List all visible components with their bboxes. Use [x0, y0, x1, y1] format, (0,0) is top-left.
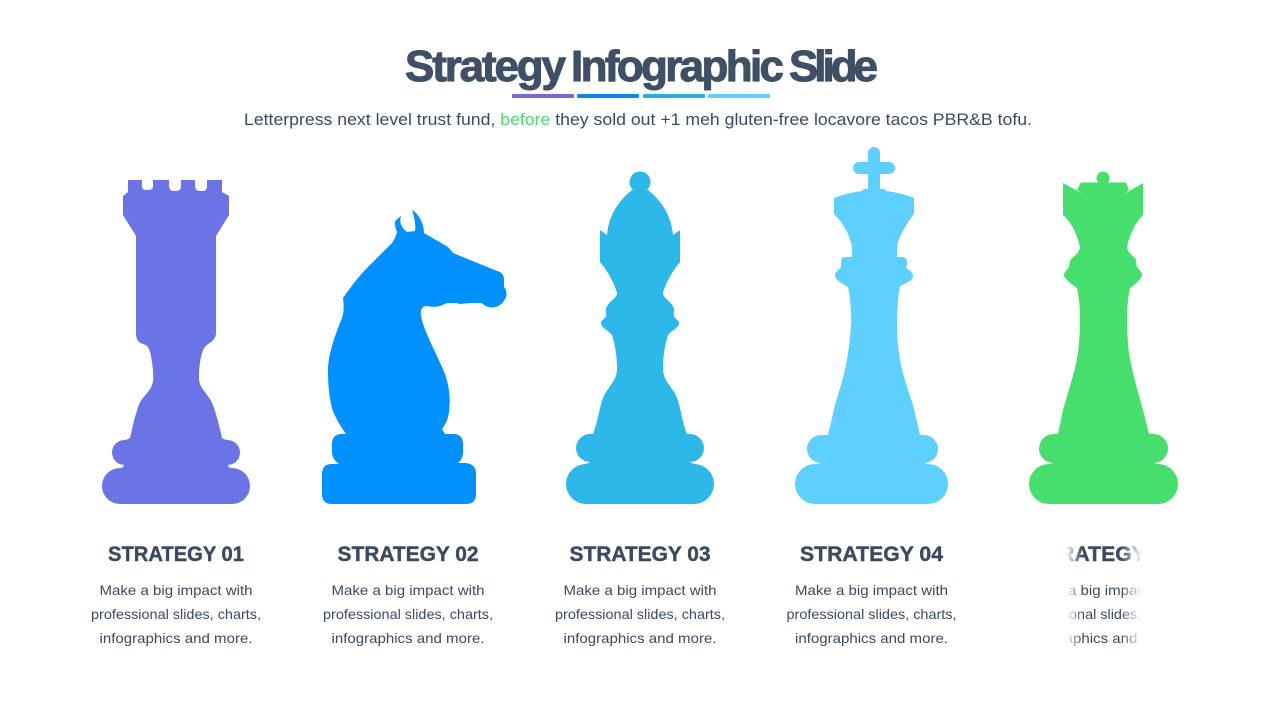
strategy 05 text, faded at both edges: infographics and more.: [1027, 630, 1180, 646]
strategy 02 text: STRATEGY 02: [338, 543, 478, 566]
strategy 02 text: professional slides, charts,: [323, 606, 493, 622]
icon: queen chess piece: [1029, 172, 1178, 504]
strategy 03 text: Make a big impact with: [564, 582, 716, 598]
strategy 01 text: professional slides, charts,: [91, 606, 261, 622]
strategy 04 text: STRATEGY 04: [800, 543, 943, 566]
icon: knight chess piece: [322, 210, 507, 504]
icon: king chess piece: [795, 147, 948, 504]
strategy 02 text: [323, 543, 493, 646]
strategy 01 text: infographics and more.: [100, 630, 252, 646]
title: Infographic: [571, 42, 784, 91]
strategy 03 text: infographics and more.: [564, 630, 716, 646]
strategy 03 text: [555, 543, 725, 646]
strategy 03 text: STRATEGY 03: [570, 543, 710, 566]
subtitle: Letterpress next level trust fund, before they sold out +1 meh gluten-free locavore tacos PBR&B tofu.: [244, 110, 1032, 129]
strategy 04 text: Make a big impact with: [795, 582, 948, 598]
strategy 01 text: Make a big impact with: [100, 582, 252, 598]
strategy 01 text: [91, 543, 261, 646]
title: Slide: [789, 42, 878, 91]
strategy 05 text, faded at both edges: professional slides, charts,: [1018, 606, 1188, 622]
strategy 05 text, faded at both edges: [1066, 546, 1141, 646]
icon: rook chess piece: [102, 180, 250, 504]
strategy 04 text: infographics and more.: [795, 630, 948, 646]
strategy 02 text: infographics and more.: [332, 630, 484, 646]
strategy 05 text, faded at both edges: Make a big impact with: [1027, 582, 1180, 598]
strategy 04 text: professional slides, charts,: [786, 606, 956, 622]
strategy 04 text: [786, 543, 956, 646]
strategy 02 text: Make a big impact with: [332, 582, 484, 598]
strategy 01 text: STRATEGY 01: [108, 543, 244, 566]
title underline bars: [512, 94, 770, 98]
title: Strategy: [405, 42, 567, 91]
title: [405, 42, 878, 91]
strategy 03 text: professional slides, charts,: [555, 606, 725, 622]
strategy 05 text, faded at both edges: STRATEGY 05: [1032, 543, 1175, 566]
icon: bishop chess piece: [566, 172, 714, 504]
